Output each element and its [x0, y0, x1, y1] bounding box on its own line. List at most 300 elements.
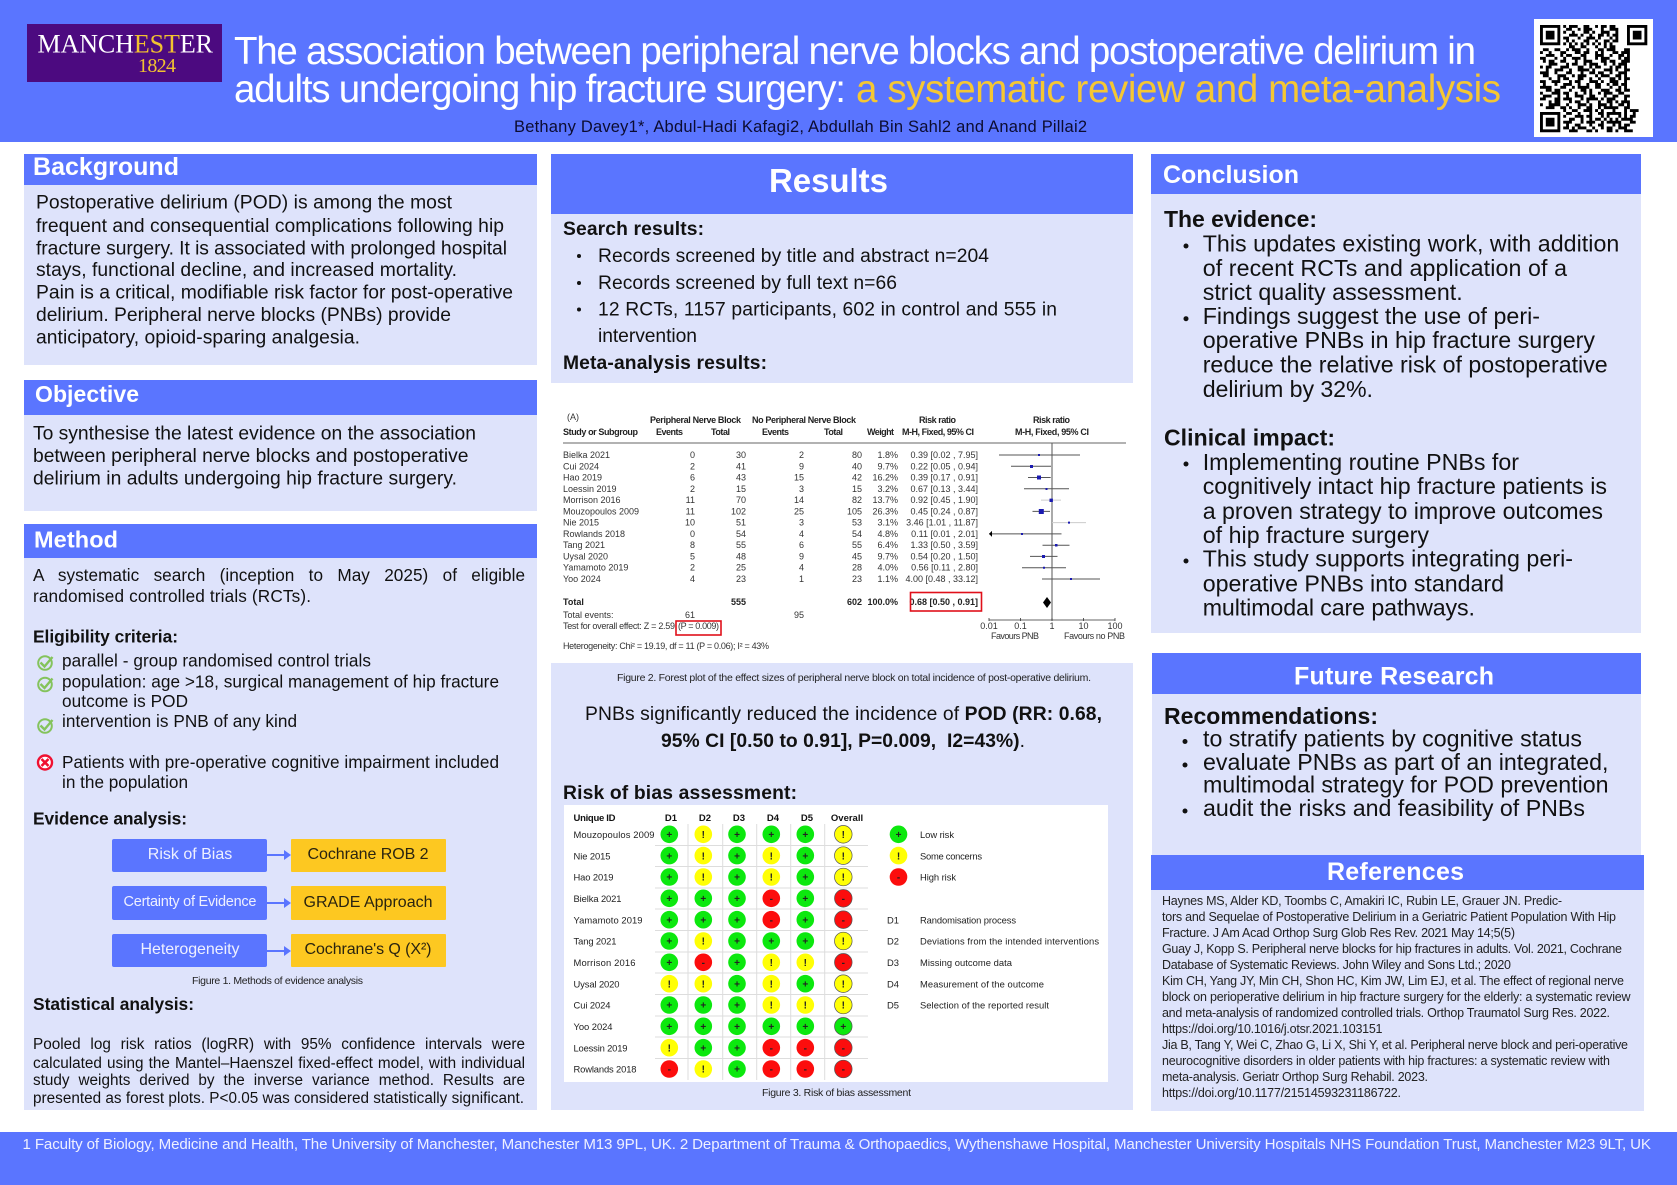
study rows: Mouzopoulos 2009	[563, 506, 639, 516]
row: Mouzopoulos 2009: !	[702, 830, 705, 841]
text block: reference list: neurocognitive disorders in older patients with hip fractures: a systematic review with	[1162, 1054, 1610, 1068]
axis: Favours PNB	[991, 631, 1039, 641]
study rows: 70	[736, 495, 746, 505]
chart: forest plot: M-H, Fixed, 95% CI	[1015, 427, 1089, 437]
study rows: 0.39 [0.02 , 7.95]	[910, 450, 978, 460]
study rows: 6.4%	[877, 540, 898, 550]
legend: risk levels	[890, 826, 982, 886]
study rows: 54	[852, 529, 862, 539]
study rows: 11	[686, 506, 695, 516]
heading: statistical analysis: Statistical analysis:	[33, 994, 194, 1014]
text block: reference list: and meta-analysis of randomized controlled trials. Orthop Traumatol Surg Res. 2022.	[1162, 1006, 1610, 1020]
text block: background	[36, 192, 513, 348]
text block: statistical analysis: study weights derived by the inverse variance method. Results are	[33, 1072, 525, 1089]
column headers: D1	[665, 813, 678, 824]
chart: forest plot	[551, 383, 1133, 663]
list: inclusion criteria: parallel - group randomised control trials	[62, 651, 371, 671]
legend: domains: Selection of the reported result	[920, 1000, 1049, 1011]
text block: reference list: Fracture. J Am Acad Orthop Surg Glob Res Rev. 2021 May 14;5(5)	[1162, 926, 1515, 940]
list: exclusion criteria: in the population	[62, 772, 188, 792]
diagram: methods of evidence analysis: GRADE Approach	[304, 894, 432, 911]
study rows: 1.33 [0.50 , 3.59]	[910, 540, 978, 550]
study rows: 4	[799, 563, 804, 573]
row: Nie 2015: Nie 2015	[574, 850, 610, 861]
row: Yoo 2024: +	[768, 1022, 774, 1033]
text block: the evidence: Findings suggest the use of peri-	[1203, 303, 1540, 329]
text block: reference list: Jia B, Tang Y, Wei C, Zhao G, Li X, Shi Y, et al. Peripheral nerve block and peri-operative	[1162, 1038, 1628, 1052]
heading: risk of bias assessment: Risk of bias assessment:	[563, 783, 797, 804]
axis: 10	[1078, 621, 1089, 631]
text block: reference list: block on perioperative delirium in hip fracture surgery for the elderly: a systematic review	[1162, 990, 1631, 1004]
row: Nie 2015: !	[842, 851, 845, 862]
study rows: 0	[690, 529, 695, 539]
text block: recommendations: to stratify patients by cognitive status	[1203, 726, 1582, 752]
study rows: 4	[690, 574, 695, 584]
text block: clinical impact: of hip fracture surgery	[1203, 522, 1429, 548]
heading: background: Background	[33, 153, 179, 181]
icon: green check	[38, 656, 52, 670]
row: Hao 2019: +	[802, 873, 808, 884]
total row: 95	[794, 610, 804, 620]
row: Yamamoto 2019: -	[842, 915, 845, 926]
icon: green check	[38, 678, 52, 691]
row: Morrison 2016: +	[666, 958, 672, 969]
study rows: 28	[852, 563, 862, 573]
row: Nie 2015: !	[702, 851, 705, 862]
text block: the evidence: of recent RCTs and application of a	[1203, 255, 1567, 281]
text block: clinical impact: Clinical impact:	[1164, 425, 1335, 451]
panel: background	[24, 153, 537, 365]
study rows: 9.7%	[877, 551, 898, 561]
study rows: 14	[794, 495, 804, 505]
legend: risk levels: High risk	[920, 872, 956, 883]
study rows: 3	[799, 484, 804, 494]
row: Loessin 2019: +	[734, 1044, 740, 1054]
text block: clinical impact: cognitively intact hip fracture patients is	[1203, 473, 1607, 499]
chart: forest plot: Risk ratio	[1033, 415, 1070, 425]
text block: objective: delirium in adults undergoing hip fracture surgery.	[33, 468, 457, 490]
chart: forest plot: (A)	[567, 412, 579, 422]
text block: background: frequent and consequential complications following hip	[36, 216, 504, 237]
heading: references	[1151, 855, 1644, 890]
text block: statistical analysis	[33, 1036, 525, 1107]
row: Nie 2015: +	[666, 851, 672, 862]
row: Cui 2024: !	[804, 1001, 807, 1012]
row: Hao 2019: !	[702, 873, 705, 884]
text block: reference list: https://doi.org/10.1016/j.otsr.2021.103151	[1162, 1022, 1383, 1036]
total row: 100.0%	[867, 597, 898, 607]
study rows: 16.2%	[872, 472, 898, 482]
study rows: 15	[852, 484, 862, 494]
icon: red cross	[38, 756, 52, 770]
text block: objective: To synthesise the latest evidence on the association	[33, 424, 476, 445]
total row	[563, 597, 1051, 651]
row: Mouzopoulos 2009: +	[768, 830, 774, 841]
study rows: 55	[852, 540, 862, 550]
study rows: 1.8%	[877, 450, 898, 460]
study rows: 9	[799, 461, 804, 471]
total row: 61	[685, 610, 695, 620]
study rows: Rowlands 2018	[563, 529, 625, 539]
text block: search	[33, 565, 525, 606]
study rows	[563, 450, 978, 584]
row: Loessin 2019: -	[804, 1044, 807, 1054]
study rows: 9.7%	[877, 461, 898, 471]
column headers: Unique ID	[574, 813, 616, 824]
study rows: 3.46 [1.01 , 11.87]	[906, 518, 978, 528]
heading: method	[24, 524, 537, 558]
row: Rowlands 2018: +	[734, 1065, 740, 1076]
text block: objective	[33, 424, 476, 490]
study rows: 1	[799, 574, 804, 584]
panel: objective	[24, 380, 537, 511]
row: Yamamoto 2019: -	[770, 915, 773, 926]
row: Yamamoto 2019	[574, 911, 852, 928]
study rows: 2	[690, 461, 695, 471]
heading: references: References	[1327, 858, 1464, 886]
study rows: 2	[690, 484, 695, 494]
study rows: 0.56 [0.11 , 2.80]	[911, 563, 978, 573]
text block: recommendations	[1164, 703, 1608, 821]
study rows: 26.3%	[872, 506, 898, 516]
row: Cui 2024: !	[842, 1001, 845, 1012]
axis: 0.1	[1014, 621, 1027, 631]
study rows: 15	[736, 484, 746, 494]
chart: forest plot: Events	[762, 427, 789, 437]
row: Rowlands 2018: -	[770, 1065, 773, 1076]
study rows: 15	[794, 472, 804, 482]
row: Tang 2021: +	[768, 937, 774, 948]
text block: search results: Search results:	[563, 219, 704, 240]
row: Mouzopoulos 2009	[574, 826, 852, 843]
row: Morrison 2016: !	[804, 958, 807, 969]
title	[234, 30, 1501, 111]
row: Tang 2021: +	[734, 937, 740, 948]
row: Hao 2019: +	[734, 873, 740, 884]
column headers: Overall	[831, 813, 863, 824]
legend: domains: D5	[887, 1000, 899, 1011]
study rows: 102	[731, 506, 746, 516]
text block: clinical impact: operative PNBs into standard	[1203, 571, 1504, 597]
axis: 0.01	[980, 621, 998, 631]
row: Mouzopoulos 2009: +	[802, 830, 808, 841]
text block: clinical impact: This study supports integrating peri-	[1203, 546, 1573, 572]
total row: 602	[847, 597, 862, 607]
heading: method: Method	[34, 526, 118, 552]
row: Loessin 2019: Loessin 2019	[574, 1042, 628, 1054]
study rows: 5	[690, 551, 695, 561]
heading: future research	[1152, 653, 1641, 694]
study rows: 54	[736, 529, 746, 539]
study rows: 105	[847, 506, 862, 516]
study rows: 1.1%	[877, 574, 898, 584]
text block: reference list: https://doi.org/10.1177/21514593231186722.	[1162, 1086, 1401, 1100]
total row: 555	[731, 597, 746, 607]
study rows: 0.92 [0.45 , 1.90]	[910, 495, 978, 505]
row: Rowlands 2018: -	[842, 1065, 845, 1076]
row: Bielka 2021: +	[666, 894, 672, 905]
row: Loessin 2019	[574, 1039, 852, 1056]
study rows: Morrison 2016	[563, 495, 621, 505]
row: Cui 2024	[574, 996, 852, 1014]
row: Yoo 2024	[574, 1018, 852, 1035]
study rows: Loessin 2019	[563, 484, 617, 494]
study rows: 3.1%	[877, 518, 898, 528]
callout: key result	[585, 704, 1102, 752]
row: Rowlands 2018: !	[702, 1065, 705, 1076]
study rows: 6	[799, 540, 804, 550]
text block: recommendations: Recommendations:	[1164, 703, 1378, 729]
list: inclusion criteria: outcome is POD	[62, 691, 188, 711]
row: Tang 2021	[574, 932, 852, 950]
total row: (P = 0.009)	[678, 621, 719, 631]
row: Nie 2015: +	[734, 851, 740, 862]
row: Uysal 2020: !	[668, 979, 671, 990]
row: Loessin 2019: !	[668, 1044, 671, 1054]
total row: Total events:	[563, 610, 614, 620]
chart: forest plot: Weight	[867, 427, 894, 437]
row: Nie 2015: !	[770, 851, 773, 862]
row: Bielka 2021: +	[700, 894, 706, 905]
heading: results: Results	[769, 162, 888, 199]
chart: forest plot: Total	[711, 427, 730, 437]
study rows: 4.00 [0.48 , 33.12]	[905, 574, 978, 584]
title: adults undergoing hip fracture surgery:	[234, 68, 846, 111]
callout: key result: PNBs significantly reduced the incidence of POD (RR: 0.68,	[585, 704, 1102, 725]
caption: figure 3: Figure 3. Risk of bias assessment	[762, 1087, 911, 1099]
row: Bielka 2021: +	[802, 894, 808, 905]
legend: domains: D4	[887, 978, 899, 989]
text block: reference list	[1162, 894, 1631, 1100]
confidence intervals and point estimates	[989, 454, 1100, 580]
study rows: Uysal 2020	[563, 551, 608, 561]
chart: risk of bias traffic light plot	[564, 805, 1108, 1082]
text block: search results: Records screened by title and abstract n=204	[598, 246, 989, 267]
row: Morrison 2016: -	[842, 958, 845, 969]
text block: background: anticipatory, opioid-sparing analgesia.	[36, 327, 360, 348]
column headers: D2	[699, 813, 711, 824]
list: exclusion criteria: Patients with pre-operative cognitive impairment included	[62, 752, 499, 772]
study rows: 0.11 [0.01 , 2.01]	[911, 529, 978, 539]
axis: 1	[1049, 621, 1055, 631]
study rows: 48	[736, 551, 746, 561]
heading: objective	[24, 380, 537, 415]
study rows: 13.7%	[872, 495, 898, 505]
text block: search: randomised controlled trials (RCTs).	[33, 586, 311, 606]
logo: University of Manchester: 1824	[138, 55, 176, 77]
study rows: 4.8%	[877, 529, 898, 539]
text block: the evidence: delirium by 32%.	[1203, 376, 1373, 402]
text block: the evidence	[1164, 206, 1619, 402]
text block: objective: between peripheral nerve blocks and postoperative	[33, 446, 468, 467]
legend: domains	[887, 914, 1099, 1011]
row: Yoo 2024: +	[802, 1022, 808, 1033]
study rows: 8	[690, 540, 695, 550]
study rows: 0.22 [0.05 , 0.94]	[910, 461, 978, 471]
study rows: 25	[736, 563, 746, 573]
row: Loessin 2019: -	[770, 1044, 773, 1054]
footer: affiliations: 1 Faculty of Biology, Medicine and Health, The University of Manchester, Manchester M13 9PL, UK. 2 Department of Trauma & Orthopaedics, Wythenshawe Hospital, Manchester University Hospitals NHS Foundation Trust, Manchester M23 9LT, UK	[22, 1136, 1651, 1153]
icon: QR code	[1534, 19, 1653, 137]
row: Yoo 2024: +	[700, 1022, 706, 1033]
row: Bielka 2021: +	[734, 894, 740, 905]
text block: statistical analysis: calculated using the Mantel–Haenszel fixed-effect model, with individual	[33, 1055, 525, 1072]
legend: domains: D2	[887, 936, 899, 947]
text block: background: stays, functional decline, and increased mortality.	[36, 260, 457, 281]
legend: domains: D1	[887, 914, 899, 925]
legend: risk levels: Low risk	[920, 829, 954, 840]
row: Tang 2021: +	[802, 937, 808, 948]
study rows: 30	[736, 450, 746, 460]
chart: forest plot: Risk ratio	[919, 415, 956, 425]
text block: the evidence: strict quality assessment.	[1203, 279, 1463, 305]
row: Cui 2024: +	[666, 1001, 672, 1012]
study rows: 9	[799, 551, 804, 561]
legend: domains: Missing outcome data	[920, 957, 1013, 968]
row: Loessin 2019: -	[842, 1044, 845, 1054]
study rows: 0	[690, 450, 695, 460]
list: exclusion criteria	[38, 752, 499, 792]
row: Tang 2021: Tang 2021	[574, 936, 616, 947]
text block: clinical impact: Implementing routine PNBs for	[1203, 449, 1519, 475]
footer: affiliations	[0, 1132, 1677, 1185]
study rows: 40	[852, 461, 862, 471]
row: Cui 2024: Cui 2024	[574, 1000, 610, 1011]
row: Tang 2021: !	[842, 937, 845, 948]
panel: references	[1151, 855, 1644, 1111]
text block: search results: intervention	[598, 326, 697, 347]
row: Hao 2019: !	[770, 873, 773, 884]
column headers	[574, 813, 863, 824]
row: Hao 2019: +	[666, 873, 672, 884]
column headers: D5	[801, 813, 814, 824]
title: a systematic review and meta-analysis	[856, 68, 1501, 111]
text block: search results	[563, 219, 1057, 374]
study rows: 45	[852, 551, 862, 561]
study rows: 11	[686, 495, 695, 505]
text block: background: Postoperative delirium (POD) is among the most	[36, 192, 453, 214]
chart: forest plot: Peripheral Nerve Block	[650, 415, 742, 425]
row: Yamamoto 2019: Yamamoto 2019	[574, 914, 642, 925]
row: Nie 2015	[574, 847, 852, 864]
study rows: 23	[736, 574, 746, 584]
row: Uysal 2020: Uysal 2020	[574, 978, 620, 989]
text block: the evidence: This updates existing work, with addition	[1203, 231, 1619, 257]
icon: green check	[38, 719, 52, 733]
column headers: D3	[733, 813, 745, 824]
authors: Bethany Davey1*, Abdul-Hadi Kafagi2, Abdullah Bin Sahl2 and Anand Pillai2	[514, 118, 1087, 136]
diagram: methods of evidence analysis	[112, 839, 446, 967]
row: Uysal 2020: !	[842, 979, 845, 990]
study rows: 51	[736, 518, 746, 528]
study rows: 25	[794, 506, 804, 516]
row: Bielka 2021	[574, 890, 852, 907]
study rows: 43	[736, 472, 746, 482]
text block: clinical impact	[1164, 425, 1607, 621]
study rows: 2	[799, 450, 804, 460]
text block: reference list: meta-analysis. Geriatr Orthop Surg Rehabil. 2023.	[1162, 1070, 1428, 1084]
panel: results	[551, 154, 1133, 1110]
row: Yoo 2024: +	[840, 1022, 846, 1033]
row: Uysal 2020: +	[734, 979, 740, 990]
row: Uysal 2020: !	[770, 979, 773, 990]
row: Yamamoto 2019: +	[700, 915, 706, 926]
row: Rowlands 2018: Rowlands 2018	[574, 1064, 636, 1075]
row: Hao 2019	[574, 868, 852, 886]
legend: risk levels: Some concerns	[920, 850, 982, 861]
row: Rowlands 2018	[574, 1060, 852, 1078]
study rows: 53	[852, 518, 862, 528]
study rows: 41	[736, 461, 746, 471]
text block: the evidence: reduce the relative risk of postoperative	[1203, 352, 1608, 378]
heading: results	[551, 154, 1133, 214]
caption: figure 1: Figure 1. Methods of evidence analysis	[192, 975, 363, 987]
header banner	[0, 0, 1677, 142]
study rows: 82	[852, 495, 862, 505]
heading: background	[24, 153, 537, 185]
text block: statistical analysis: presented as forest plots. P<0.05 was considered statistically significant.	[33, 1090, 524, 1107]
study rows: Tang 2021	[563, 540, 605, 550]
axis: 100	[1107, 621, 1123, 631]
study rows: 55	[736, 540, 746, 550]
logo: University of Manchester	[27, 24, 222, 82]
text block: clinical impact: multimodal care pathways.	[1203, 595, 1475, 621]
heading: evidence analysis: Evidence analysis:	[33, 809, 187, 829]
row: Bielka 2021: -	[842, 894, 845, 905]
legend: risk levels: !	[897, 851, 900, 862]
study rows: Cui 2024	[563, 461, 599, 471]
panel: method	[24, 524, 537, 1110]
text block: search results: 12 RCTs, 1157 participants, 602 in control and 555 in	[598, 300, 1057, 320]
text block: clinical impact: a proven strategy to improve outcomes	[1203, 498, 1603, 524]
logo: University of Manchester: MANCHESTER	[38, 30, 214, 59]
diagram: methods of evidence analysis: Heterogeneity	[140, 941, 240, 958]
text block: background: Pain is a critical, modifiable risk factor for post-operative	[36, 282, 513, 303]
row: Mouzopoulos 2009: !	[842, 830, 845, 841]
study rows: 42	[852, 472, 862, 482]
text block: recommendations: multimodal strategy for POD prevention	[1203, 772, 1608, 798]
row: Mouzopoulos 2009: +	[734, 830, 740, 841]
row: Morrison 2016: +	[734, 958, 740, 969]
callout: key result: 95% CI [0.50 to 0.91], P=0.009, I2=43%).	[661, 731, 1025, 752]
study rows: 6	[690, 472, 695, 482]
row: Morrison 2016	[574, 954, 852, 971]
row: Yoo 2024: Yoo 2024	[574, 1021, 612, 1032]
heading: conclusion	[1151, 154, 1641, 194]
legend: risk levels: +	[896, 830, 902, 841]
row: Bielka 2021: Bielka 2021	[574, 893, 622, 904]
text block: background: delirium. Peripheral nerve blocks (PNBs) provide	[36, 305, 451, 326]
row: Rowlands 2018: -	[668, 1065, 671, 1076]
row: Yoo 2024: +	[666, 1022, 672, 1033]
row: Nie 2015: +	[802, 851, 808, 862]
study rows: 10	[685, 518, 695, 528]
legend: domains: Measurement of the outcome	[920, 978, 1044, 989]
row: Loessin 2019: +	[700, 1044, 706, 1054]
diagram: methods of evidence analysis: Cochrane's Q (X²)	[304, 941, 432, 958]
row: Cui 2024: +	[734, 1001, 740, 1012]
text block: recommendations: evaluate PNBs as part of an integrated,	[1203, 749, 1608, 775]
list: inclusion criteria: population: age >18, surgical management of hip fracture	[62, 672, 499, 692]
study rows: 4	[799, 529, 804, 539]
row: Yamamoto 2019: +	[802, 915, 808, 926]
row: Yamamoto 2019: +	[734, 915, 740, 926]
text block: the evidence: operative PNBs in hip fracture surgery	[1203, 327, 1595, 353]
total row: 0.68 [0.50 , 0.91]	[909, 597, 978, 607]
legend: risk levels: -	[897, 873, 900, 884]
text block: reference list: tors and Sequelae of Postoperative Delirium in a Geriatric Patient Population With Hip	[1162, 910, 1616, 924]
study rows: 3	[799, 518, 804, 528]
